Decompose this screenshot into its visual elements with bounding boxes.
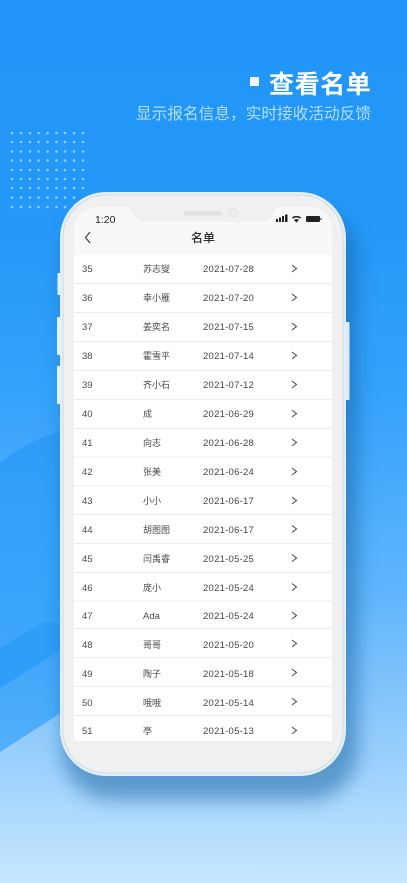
row 38: 2021-07-14	[203, 351, 254, 362]
phone mockup	[57, 192, 358, 800]
row 36: 2021-07-20	[203, 293, 254, 304]
row 50	[82, 697, 296, 709]
row 35: 2021-07-28	[203, 264, 254, 275]
row 44	[82, 524, 296, 536]
row 39: 39	[82, 380, 93, 391]
side buttons: left	[57, 273, 62, 404]
phone screen	[74, 207, 332, 741]
row 41: 41	[82, 438, 93, 449]
subtitle: 显示报名信息，实时接收活动反馈	[136, 105, 371, 123]
row 35: 35	[82, 264, 93, 275]
row 36	[82, 293, 296, 304]
row 47	[82, 611, 296, 622]
row 40: 2021-06-29	[203, 409, 254, 420]
row 39: 2021-07-12	[203, 380, 254, 391]
row 41: 2021-06-28	[203, 438, 254, 449]
row 37: 姜奕名	[143, 321, 170, 332]
row 50: 50	[82, 698, 93, 709]
row 46: 2021-05-24	[203, 583, 254, 594]
row 37: 37	[82, 322, 93, 333]
row 51: 2021-05-13	[203, 726, 254, 737]
back arrow	[86, 232, 90, 243]
row 38: 38	[82, 351, 93, 362]
row 51	[82, 725, 296, 737]
row 48: 48	[82, 640, 93, 651]
row 37	[82, 321, 296, 333]
row 48: 2021-05-20	[203, 640, 254, 651]
row 43: 2021-06-17	[203, 496, 254, 507]
row 42: 42	[82, 467, 93, 478]
table background	[74, 255, 332, 741]
row 37: 2021-07-15	[203, 322, 254, 333]
row 35: 苏志燮	[143, 263, 170, 274]
row 36: 幸小雁	[143, 293, 170, 303]
phone outer frame	[60, 192, 346, 776]
row 51: 亭	[143, 725, 152, 736]
dot grid	[11, 132, 84, 208]
list table	[74, 255, 332, 741]
row 46	[82, 582, 296, 594]
row 45: 2021-05-25	[203, 554, 254, 565]
status bar icons	[276, 214, 322, 222]
row 49: 陶子	[143, 668, 161, 679]
row 43: 43	[82, 496, 93, 507]
decorative swoosh: band	[0, 622, 64, 688]
phone shadow	[62, 208, 358, 800]
title with square bullet: 查看名单	[269, 71, 371, 99]
row 42: 2021-06-24	[203, 467, 254, 478]
row 47: 2021-05-24	[203, 611, 254, 622]
notch speaker and camera	[184, 208, 238, 218]
row 40: 40	[82, 409, 93, 420]
row 38	[82, 351, 296, 362]
row 45	[82, 553, 296, 565]
row 51: 51	[82, 726, 93, 737]
row 43	[82, 496, 296, 507]
phone body	[63, 195, 343, 773]
row 40: 成	[143, 408, 152, 419]
screen title: 名单	[191, 230, 215, 245]
row 47: Ada	[143, 611, 161, 622]
decorative swoosh: large	[0, 431, 64, 752]
row 45: 45	[82, 554, 93, 565]
row 39	[82, 379, 296, 391]
row 41	[82, 437, 296, 449]
row 49	[82, 668, 296, 680]
row 48	[82, 640, 296, 651]
row 42: 张美	[143, 466, 161, 477]
row 49: 49	[82, 669, 93, 680]
row 48: 哥哥	[143, 640, 161, 650]
row 41: 向志	[143, 437, 161, 448]
row 36: 36	[82, 293, 93, 304]
row 38: 霍雪平	[143, 351, 170, 361]
row 35	[82, 263, 296, 275]
row 40	[82, 408, 296, 420]
row 50: 2021-05-14	[203, 698, 254, 709]
side button: right	[345, 322, 350, 400]
row dividers	[74, 284, 332, 716]
row 47: 47	[82, 611, 93, 622]
row 50: 哦哦	[143, 697, 161, 708]
row 45: 闫禹睿	[143, 553, 170, 564]
row 49: 2021-05-18	[203, 669, 254, 680]
row 42	[82, 466, 296, 478]
row 44: 胡图图	[143, 524, 170, 535]
status bar time: 1:20	[95, 214, 116, 226]
row 44: 2021-06-17	[203, 525, 254, 536]
row 46: 46	[82, 583, 93, 594]
row 44: 44	[82, 525, 93, 536]
row 46: 庞小	[143, 582, 161, 593]
row 43: 小小	[143, 496, 161, 506]
row 39: 齐小石	[143, 379, 170, 390]
